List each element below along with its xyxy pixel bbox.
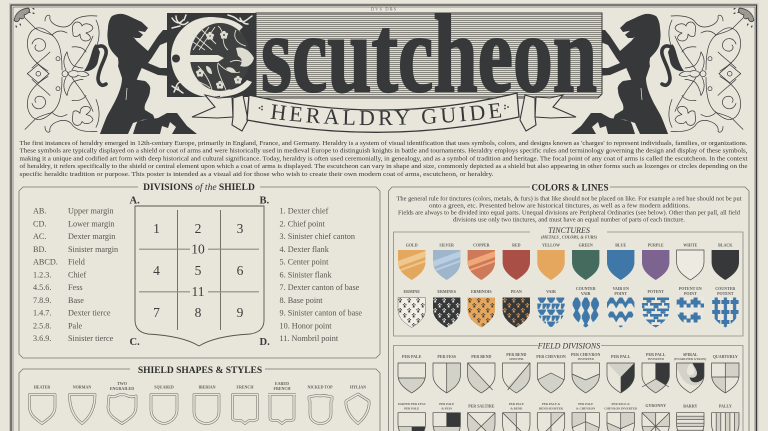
intro paragraph: specific heraldic tradition or purpose. This poster is intended as a visual aid for those who wish to create their own modern coat of arms, escutcheon, or heraldry.	[20, 171, 494, 178]
banner fold: left	[232, 95, 248, 131]
margin codes: AB.	[33, 206, 46, 216]
margin codes: Pale	[68, 321, 82, 330]
rules text: onto a green, etc. Presented below are historical tinctures, as well as a few modern additions.	[429, 202, 691, 209]
shield diagram: 1	[153, 221, 160, 236]
fur labels: ERMINOIS	[471, 289, 492, 294]
shield diagram: 7	[153, 305, 160, 320]
division labels row two: PER PALE	[404, 406, 419, 410]
margin codes: ABCD.	[33, 258, 58, 267]
margin codes: 2.5.8.	[33, 321, 51, 330]
banner tail: left	[192, 95, 233, 118]
shape outlines	[30, 394, 369, 424]
point names: 8. Base point	[280, 296, 323, 305]
point names: 4. Dexter flank	[280, 245, 330, 254]
point names: 3. Sinister chief canton	[280, 232, 355, 241]
shield diagram: 10	[191, 242, 205, 256]
point names	[280, 206, 362, 343]
point names: 7. Dexter canton of base	[280, 283, 360, 292]
rules text: Fields are always to be divided into equal parts. Unequal divisions are Peripheral Ordinaries (see below). Other than per pall, all field	[398, 209, 740, 216]
shield diagram: 11	[192, 284, 204, 299]
tincture labels: GOLD	[406, 242, 418, 248]
division labels row one: INVERTED	[578, 357, 595, 361]
margin codes: 4.5.6.	[33, 283, 51, 292]
margin codes: 3.6.9.	[33, 334, 51, 343]
margin codes: 1.4.7.	[33, 309, 51, 318]
shape labels	[34, 381, 366, 391]
heading: SHIELD SHAPES & STYLES	[138, 366, 262, 376]
corner letters: D.	[260, 337, 270, 348]
intro paragraph: These symbols are typically displayed on a shield or coat of arms and were historically used in medieval Europe to distinguish knights in battle and tournaments. Heraldry employs specific rules and terminology governing the design and display of these symbols,	[20, 148, 748, 155]
division labels row one	[402, 352, 738, 361]
panel: colors and lines	[388, 182, 749, 431]
tincture labels: BLUE	[615, 242, 626, 248]
shield diagram: 4	[153, 263, 160, 278]
shape labels: FRENCH	[237, 384, 254, 390]
tincture shields	[398, 250, 739, 280]
corner letters	[130, 196, 270, 348]
margin codes	[33, 206, 118, 343]
margin codes: Base	[68, 296, 84, 305]
subheading: (METALS , COLORS, & FURS)	[541, 234, 598, 239]
intro paragraph: making it a unique and codified art form with deep historical and cultural significance. Today, heraldry is often used ceremonially, in genealogy, and as a symbol of tradition and heritage. The focal point of any coat of arms is called the escutcheon. In the context	[20, 155, 748, 162]
panel: divisions of the shield	[19, 182, 380, 358]
tincture labels	[406, 242, 733, 248]
division labels row one: INVERTED	[648, 357, 665, 361]
corner letters: B.	[260, 196, 270, 206]
fur labels: POTENT	[647, 289, 664, 294]
division labels row two: & FESS	[441, 406, 452, 410]
point names: 2. Chief point	[280, 219, 325, 228]
intro paragraph: of heraldry, it refers specifically to the shield or central element upon which a coat of arms is displayed. The escutcheon can vary in shape and size, commonly depicted as a shield but also appearing in other forms such as lozenges or circles depending on the	[20, 163, 748, 170]
rules text	[396, 195, 742, 223]
division labels row one: PER PALL	[646, 352, 666, 357]
division labels row one: SINISTER	[509, 357, 524, 361]
intro paragraph	[20, 140, 748, 178]
tincture labels: COPPER	[473, 242, 490, 248]
shield diagram	[135, 206, 264, 346]
margin codes: BD.	[33, 245, 46, 254]
shield diagram: 5	[195, 263, 202, 278]
point names: 9. Sinister canton of base	[280, 309, 362, 318]
fur labels	[403, 286, 735, 296]
division labels row one: PER FESS	[437, 354, 457, 359]
division labels row one: PER BEND	[471, 354, 491, 359]
margin codes: Field	[68, 258, 85, 267]
banner tail: right	[535, 95, 576, 118]
panel: tinctures	[394, 226, 743, 336]
division labels row one: QUARTERLY	[713, 354, 738, 359]
tincture labels: GREEN	[579, 242, 593, 248]
division labels row two: & BEND	[510, 406, 523, 410]
fur labels: COUNTER	[715, 286, 735, 291]
division labels row one: (ENARCHED GYRON)	[674, 357, 706, 361]
rules text: The general rule for tinctures (colors, metals, & furs) is that like should not be placed on like. For example a red hue should not be put	[396, 195, 742, 202]
fur labels: COUNTER	[576, 286, 596, 291]
fur labels: PEAN	[511, 289, 522, 294]
margin codes: 1.2.3.	[33, 270, 51, 279]
division labels row two: PARTED PER FESS	[398, 402, 426, 406]
corner letters: C.	[130, 337, 140, 348]
shield diagram: 9	[237, 305, 244, 320]
illuminated initial E	[167, 13, 256, 97]
shape labels: ENGRAILED	[110, 386, 134, 391]
fur labels: VAIR EN	[613, 286, 629, 291]
margin codes: 7.8.9.	[33, 296, 51, 305]
filigree: right	[669, 8, 754, 132]
tincture labels: SILVER	[439, 242, 454, 248]
shape labels: HYLIAN	[350, 384, 366, 390]
division labels row two: GYRONNY	[645, 403, 666, 408]
corner letters: A.	[130, 196, 140, 206]
panel: shield shapes and styles	[19, 366, 380, 431]
division labels row two: PER PALE	[578, 402, 593, 406]
fur shields	[398, 298, 739, 328]
tincture labels: BLACK	[718, 242, 733, 248]
division labels row two: PER PALE &	[612, 402, 630, 406]
division labels row two: PER PALE &	[542, 402, 561, 406]
margin codes: CD.	[33, 219, 46, 228]
division labels row one: PER PALE	[402, 354, 422, 359]
division labels row one: PER PALL	[611, 354, 631, 359]
heading: DIVISIONS of the SHIELD	[143, 182, 255, 193]
filigree: left	[14, 8, 99, 132]
fur labels: VAIR	[581, 291, 591, 296]
fur labels: POINT	[614, 291, 627, 296]
division labels row one: SPIRAL	[683, 352, 698, 357]
shape labels: NICKED TOP	[307, 384, 333, 390]
division labels row two: BARRY	[683, 404, 697, 408]
shape labels: IBERIAN	[198, 384, 216, 390]
division labels row two: PER PALE	[439, 402, 454, 406]
heading: TINCTURES	[548, 226, 590, 235]
division labels row two: PER SALTIRE	[468, 404, 495, 408]
division labels row two: PER PALE	[509, 402, 524, 406]
margin codes: AC.	[33, 232, 46, 241]
shape labels: SQUARED	[154, 384, 174, 390]
division shields row one	[398, 363, 739, 394]
margin codes: Sinister tierce	[68, 334, 114, 343]
fur labels: VAIR	[546, 289, 556, 294]
fur labels: ERMINES	[437, 289, 457, 294]
banner dots	[259, 105, 509, 110]
point names: 6. Sinister flank	[280, 270, 332, 279]
subtitle	[270, 103, 502, 126]
margin codes: Dexter margin	[68, 232, 115, 241]
tincture labels: WHITE	[683, 242, 698, 248]
point names: 5. Center point	[280, 258, 329, 267]
tincture labels: YELLOW	[542, 242, 560, 248]
shield diagram: 2	[195, 221, 201, 236]
shield diagram: 6	[237, 263, 244, 278]
shape labels: HEATER	[34, 384, 50, 390]
division labels row one: PER CHEVRON	[571, 352, 601, 357]
maker mark: DVS DBS	[371, 6, 397, 12]
rules text: divisions use only two tinctures, and must have an equal number of parts of each tincture.	[453, 216, 685, 223]
fur labels: POTENT EN	[679, 286, 702, 291]
division labels row two: CHEVRON INVERTED	[604, 406, 638, 410]
margin codes: Lower margin	[68, 219, 114, 228]
margin codes: Sinister margin	[68, 245, 118, 254]
shape labels: FRENCH	[274, 386, 291, 391]
heading: FIELD DIVISIONS	[537, 342, 600, 350]
division shields row two	[398, 413, 739, 431]
point names: 1. Dexter chief	[280, 206, 329, 216]
banner fold: right	[520, 95, 536, 131]
title band	[256, 0, 602, 115]
fur labels: POINT	[684, 291, 697, 296]
lion: right	[571, 14, 684, 134]
panel: field divisions	[394, 342, 743, 431]
point names: 11. Nombril point	[280, 334, 339, 343]
division labels row one: PER BEND	[506, 352, 526, 357]
shape labels: NORMAN	[73, 384, 91, 390]
banner body	[247, 93, 519, 132]
margin codes: Fess	[68, 283, 83, 292]
division labels row two: PALLY	[719, 404, 732, 408]
margin codes: Chief	[68, 270, 86, 279]
tincture labels: PURPLE	[648, 242, 664, 248]
shield diagram: 3	[237, 221, 244, 236]
shape labels: TWO	[117, 381, 127, 386]
division labels row one: PER CHEVRON	[536, 354, 566, 359]
lion: left	[84, 14, 197, 134]
point names: 10. Honor point	[280, 321, 332, 330]
shape labels: EARED	[275, 381, 289, 386]
division labels row two	[398, 402, 732, 410]
margin codes: Upper margin	[68, 206, 114, 216]
fur labels: POTENT	[717, 291, 734, 296]
division labels row two: & CHEVRON	[576, 406, 596, 410]
heading: COLORS & LINES	[531, 182, 609, 192]
intro paragraph: The first instances of heraldry emerged in 12th-century Europe, primarily in England, France, and Germany. Heraldry is a system of visual identification that uses symbols, colors, and designs known as 'charges' to represent individuals, families, or organizations.	[20, 140, 748, 147]
fur labels: ERMINE	[403, 289, 420, 294]
tincture labels: RED	[512, 242, 521, 248]
division labels row two: BEND SINISTER	[539, 406, 564, 410]
shield diagram: 8	[195, 305, 202, 320]
banner	[192, 92, 576, 133]
subtitle: HERALDRY GUIDE	[270, 103, 502, 126]
margin codes: Dexter tierce	[68, 309, 111, 318]
